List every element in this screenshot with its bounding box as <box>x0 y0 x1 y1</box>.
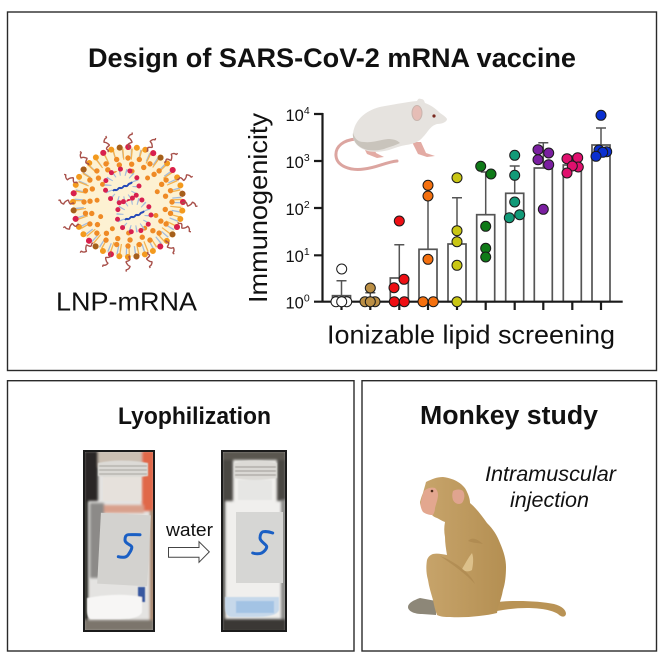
photo: reconstituted vial <box>222 451 286 632</box>
title: Design of SARS-CoV-2 mRNA vaccine <box>88 43 576 73</box>
photo: lyophilized vial <box>84 451 154 631</box>
arrow <box>168 542 209 562</box>
axis labels: 0 <box>304 292 310 304</box>
chart: immunogenicity bar chart <box>286 105 623 312</box>
label: intramuscular injection: injection <box>510 489 589 512</box>
icon: monkey <box>408 477 566 617</box>
axis labels: 2 <box>304 199 310 211</box>
icon: LNP-mRNA particle <box>58 132 197 272</box>
axis labels: 10 <box>286 201 304 219</box>
axis labels <box>286 105 310 312</box>
panel: vaccine design <box>8 12 656 370</box>
panel: lyophilization <box>8 381 354 651</box>
bars <box>332 145 610 302</box>
axis labels: 10 <box>286 248 304 266</box>
label: water: water <box>165 520 213 540</box>
axis labels: 10 <box>286 294 304 312</box>
mRNA core lower <box>117 198 151 232</box>
label: intramuscular injection <box>485 463 617 512</box>
y axis title: Immunogenicity <box>243 113 273 303</box>
label: intramuscular injection: Intramuscular <box>485 463 617 486</box>
mRNA core upper <box>105 169 139 203</box>
x axis title: Ionizable lipid screening <box>327 320 615 350</box>
label: LNP-mRNA: LNP-mRNA <box>56 286 198 316</box>
axis labels: 1 <box>304 246 310 258</box>
heading: lyophilization: Lyophilization <box>118 403 271 430</box>
heading: monkey study: Monkey study <box>420 402 599 430</box>
data points <box>331 110 612 307</box>
axis labels: 10 <box>286 154 304 172</box>
icon: mouse <box>336 99 447 169</box>
error bars <box>336 128 606 302</box>
panel: monkey study <box>362 381 656 651</box>
PEG tails <box>58 132 197 272</box>
photo frame left <box>84 451 154 631</box>
axis labels: 3 <box>304 152 310 164</box>
axis labels: 4 <box>304 105 310 117</box>
axis labels: 10 <box>286 107 304 125</box>
axes <box>314 113 623 310</box>
photo frame right <box>222 451 286 631</box>
